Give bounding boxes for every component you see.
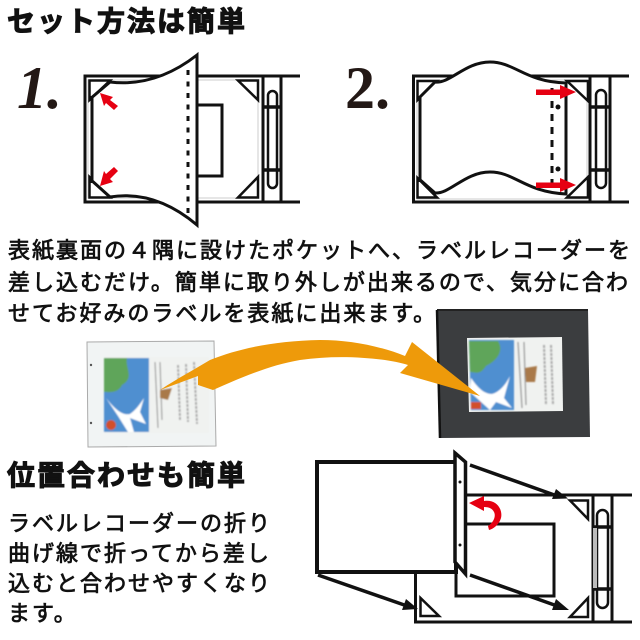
icon: red arrow bottom	[536, 178, 576, 192]
diagram: step 2	[414, 62, 629, 202]
diagram: step 1	[85, 53, 300, 227]
folded sheet	[317, 462, 456, 572]
text block: alignment explanation: 曲げ線で折ってから差し	[8, 541, 271, 566]
photo: label sheet	[87, 341, 216, 447]
arrow: lower left	[318, 575, 418, 610]
text block: alignment explanation: 込むと合わせやすくなり	[8, 571, 272, 596]
arrow: orange curved	[160, 340, 480, 396]
icon: red arrow upper	[100, 93, 118, 110]
text block: explanation: せてお好みのラベルを表紙に出来ます。	[8, 301, 437, 326]
icon: red curved arrow	[469, 496, 501, 530]
text block: explanation: 差し込むだけ。簡単に取り外しが出来るので、気分に合わ	[8, 270, 630, 295]
paper sheet	[420, 62, 565, 194]
photo: black album	[437, 310, 590, 438]
text block: alignment explanation: ラベルレコーダーの折り	[8, 511, 272, 536]
paper sheet	[92, 53, 198, 227]
heading: setup is easy: セット方法は簡単	[7, 6, 247, 37]
step number 2: 2.	[345, 55, 390, 121]
text block: alignment explanation	[8, 511, 272, 626]
step number 1: 1.	[17, 55, 62, 121]
heading: alignment is easy: 位置合わせも簡単	[7, 460, 247, 491]
arrow: upper right	[470, 465, 568, 499]
icon: red arrow top	[536, 85, 576, 99]
icon: red arrow lower	[100, 167, 118, 186]
text block: explanation	[8, 238, 632, 326]
fold flap	[455, 453, 466, 574]
text block: explanation: 表紙裏面の４隅に設けたポケットへ、ラベルレコーダーを	[8, 238, 632, 263]
arrow: lower right	[470, 575, 569, 610]
text block: alignment explanation: ます。	[8, 601, 78, 626]
diagram: folded label alignment	[317, 453, 632, 622]
